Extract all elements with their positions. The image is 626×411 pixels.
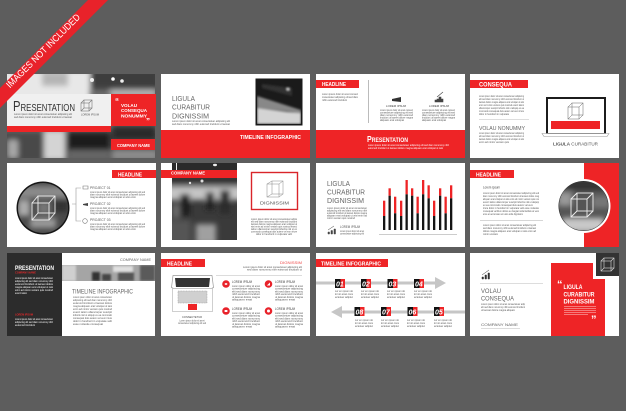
callout: quote xyxy=(111,94,156,126)
headline tag: HEADLINE xyxy=(322,82,347,88)
text block: Lorem ipsum dolor sit amet consectetuer adip xyxy=(481,302,525,306)
step 03: 03 xyxy=(388,282,396,288)
footer text: Lorem ipsum dolor sit amet consectetuer adipiscing elit sed diam nonummy nibh xyxy=(368,143,449,147)
text block: intro: sed diam nonummy nibh euismod tincidunt ut laoreet xyxy=(14,115,72,119)
banner: images not included: IMAGES NOT INCLUDED xyxy=(4,12,83,91)
feature 2: consectetuer adipiscing xyxy=(275,287,304,291)
step 01: Lor em ipsum do xyxy=(335,289,354,293)
text block right aligned: sed diam nonummy nibh euismod tincidunt ut xyxy=(247,268,302,272)
headline tag xyxy=(112,170,156,178)
step 08: ectetuer adipisc xyxy=(355,324,374,328)
step 07: 07 xyxy=(382,310,391,316)
heading: LIGULA xyxy=(172,94,195,103)
text block xyxy=(322,92,358,102)
photo: blurred interior xyxy=(7,74,155,158)
red strip xyxy=(7,126,111,132)
text block: Lorem ipsum dolor sit amet consectetuer xyxy=(327,206,367,210)
column two: LOREM IPSUM xyxy=(429,104,450,108)
project 03: diam nonummy nibh euismod tincidunt ut laoreet dolore xyxy=(90,224,145,228)
sidebar text: euismod tincidunt ut laoreet dolore xyxy=(15,282,54,286)
heading xyxy=(172,94,210,120)
text block: commodo consequat duis autem vel eum iriure xyxy=(479,109,524,113)
text block: laoreet dolore magna aliquam erat volutpat ut wisi xyxy=(479,137,524,141)
red quote block: CURABITUR xyxy=(564,292,595,298)
step 06: 06 xyxy=(408,310,416,316)
project 02: PROJECT 02 xyxy=(90,202,111,206)
heading: presentation: PRESENTATION xyxy=(13,98,75,115)
project 01: diam nonummy nibh euismod tincidunt ut laoreet dolore xyxy=(90,192,145,196)
text block: minim veniam quis nostrud xyxy=(327,216,355,220)
red quote block: LIGULA xyxy=(564,285,583,291)
text block: minim veniam xyxy=(483,232,498,236)
heading: DIGNISSIM xyxy=(327,196,364,205)
step 04: 04 xyxy=(415,282,423,288)
text block: Lorem ipsum dolor sit amet consectetuer adipiscing xyxy=(479,131,524,135)
icon: laptop top view xyxy=(172,276,214,312)
headline tag: TIMELINE INFOGRAPHIC xyxy=(321,262,381,268)
cube caption: LOREM IPSUM xyxy=(81,114,99,116)
heading: presentation: PRESENTATION xyxy=(367,134,408,144)
photo circle with cube xyxy=(556,179,610,233)
feature 1: consectetuer adipiscing xyxy=(232,287,261,291)
heading xyxy=(481,288,514,302)
text block: aliquam erat volutpat ut wisi enim ad xyxy=(327,214,368,218)
label: company name xyxy=(481,322,520,329)
text block: exerci tation ullamcorper suscipit xyxy=(73,310,112,314)
text block: adipiscing elit sed diam nonummy nibh xyxy=(327,208,367,212)
step 03: lor sit amet cons xyxy=(387,292,406,296)
headline tag xyxy=(161,259,205,268)
text block: elit sed diam nonummy nibh euismod tincidunt ut xyxy=(479,97,524,101)
project 01: Lorem ipsum dolor sit amet consectetuer adipiscing elit sed xyxy=(90,190,145,194)
headline tag: HEADLINE xyxy=(167,262,192,268)
step 06 xyxy=(407,307,426,328)
text block: Lorem ipsum dolor sit amet consectetuer adipiscing xyxy=(479,94,524,98)
step 07: ectetuer adipisc xyxy=(381,324,400,328)
step 08 xyxy=(354,307,374,328)
step 04: Lor em ipsum do xyxy=(414,289,433,293)
red quote block xyxy=(551,263,605,336)
text block right aligned xyxy=(243,265,302,272)
text block: diam nonummy nibh euismod tincidunt ut laoreet dolore mag xyxy=(483,194,539,198)
text block: ex ea commodo consequat duis autem vel eum xyxy=(483,203,533,207)
step 05: lor sit amet cons xyxy=(434,321,453,325)
feature 4 xyxy=(265,307,304,328)
heading: CURABITUR xyxy=(172,102,210,112)
feature 4: ut laoreet dolore magna xyxy=(275,322,304,326)
text block: dolore magna aliquam erat volutpat ut wisi enim ad xyxy=(483,229,536,233)
text block xyxy=(327,206,368,220)
red subheading: COMPANY NAME xyxy=(15,270,36,274)
sidebar text: Lorem ipsum dolor sit amet consectetuer xyxy=(15,276,53,280)
text block: consequat duis autem vel eum iriure xyxy=(73,316,113,320)
light title panel xyxy=(7,94,111,126)
sidebar text: adipiscing elit sed diam nonummy nibh xyxy=(15,320,53,324)
feature 2: LOREM IPSUM xyxy=(275,280,295,284)
step 04 xyxy=(414,279,433,299)
headline tag xyxy=(470,170,514,178)
project 01: PROJECT 01 xyxy=(90,186,111,190)
feature 4: Lorem ipsum dolor sit amet xyxy=(275,311,303,315)
feature 2: elit sed diam nonummy xyxy=(275,289,304,293)
heading: DIGNISSIM xyxy=(172,112,209,120)
project 02: magna aliquam erat volutpat ut wisi enim xyxy=(90,211,136,215)
lorem caption: LOREM IPSUM xyxy=(340,225,360,229)
headline tag: CONSEQUA xyxy=(479,82,513,88)
project 02 xyxy=(90,202,145,215)
text block: enim ad minim veniam quis nostrud exerci tation xyxy=(479,103,524,107)
text block: nibh euismod tincidunt xyxy=(322,98,347,102)
text block xyxy=(73,295,113,326)
step 08: 08 xyxy=(356,310,363,316)
heading: timeline infographic: TIMELINE INFOGRAPHIC xyxy=(72,288,133,296)
text block: ullamcorper suscipit lobortis nisl ut aliquip ex ea xyxy=(479,106,524,110)
feature 4: consectetuer adipiscing xyxy=(275,314,304,318)
label: dignissim: DIGNISSIM xyxy=(280,260,302,265)
icon: megaphone xyxy=(392,97,401,102)
text block: lobortis nisl ut aliquip ex ea commodo xyxy=(73,313,112,317)
headline tag xyxy=(316,259,388,268)
label: company name xyxy=(161,170,237,178)
heading xyxy=(327,179,365,205)
column one: Lorem ipsum dolor sit amet consect xyxy=(380,108,413,112)
text block: euismod tincidunt ut laoreet dolore xyxy=(73,301,113,305)
column one: diam nonummy nibh euismod xyxy=(380,113,414,117)
text block: sed diam nonummy nibh euismod tincidunt ut laoreet xyxy=(172,122,230,126)
panel: slide 5 projects xyxy=(7,163,156,247)
feature 2: ut laoreet dolore magna xyxy=(275,295,304,299)
text block: sed diam nonummy nibh euismod tincidunt ut laoreet xyxy=(483,226,536,230)
text block xyxy=(483,223,536,236)
text block right aligned: Lorem ipsum dolor sit amet consectetuer adipiscing elit xyxy=(243,265,302,269)
step 02: 02 xyxy=(362,282,370,288)
step 06: Lor em ipsum do xyxy=(407,318,426,322)
panel: slide 7 bar chart xyxy=(316,163,465,247)
step 06: ectetuer adipisc xyxy=(407,324,426,328)
column two: aliquam erat volutpat xyxy=(422,118,446,122)
project 02: diam nonummy nibh euismod tincidunt ut laoreet dolore xyxy=(90,208,145,212)
text block: laoreet dolore magna aliquam erat volutpat ut xyxy=(251,222,297,226)
sidebar text: enim ad minim veniam quis nostrud xyxy=(15,288,54,292)
red side band xyxy=(584,163,619,247)
text block: dolor in hendrerit in vulputate velit xyxy=(256,232,292,236)
project 01: magna aliquam erat volutpat ut wisi enim xyxy=(90,195,136,199)
step 08: Lor em ipsum do xyxy=(355,318,374,322)
step 04: ectetuer adipisc xyxy=(414,295,433,299)
step 01: lor sit amet cons xyxy=(335,292,354,296)
panel: slide 12 quote xyxy=(470,253,619,336)
text block: dolor in hendrerit in vulputate velit xyxy=(73,319,112,323)
text block: iriure dolor in hendrerit in vulputate velit esse molestie xyxy=(483,206,539,210)
feature 1 xyxy=(222,280,261,302)
step 07: lor sit amet cons xyxy=(381,321,400,325)
label: company name: COMPANY NAME xyxy=(171,170,205,176)
text block: magna aliquam erat volutpat ut wisi xyxy=(73,304,112,308)
step 08: lor sit amet cons xyxy=(355,321,374,325)
dark sidebar xyxy=(7,253,62,336)
heading: LIGULA xyxy=(327,179,350,188)
text block: Lorem ipsum dolor sit amet consectetuer adipiscing elit sed xyxy=(483,191,539,195)
step 01: ectetuer adipisc xyxy=(335,295,354,299)
panel: slide 9 dark presentation xyxy=(7,253,155,336)
feature 3: Lorem ipsum dolor sit amet xyxy=(232,311,260,315)
project 03 xyxy=(90,218,145,231)
text block: elit sed diam nonummy nibh euismod tincidunt ut xyxy=(479,134,524,138)
feature 4: nibh euismod tincidunt xyxy=(275,319,303,323)
text block: Lorem ipsum dolor sit amet consectetuer adipis xyxy=(251,217,298,221)
icon: project 3 xyxy=(83,219,87,223)
step 07 xyxy=(381,307,400,328)
step 07: Lor em ipsum do xyxy=(381,318,400,322)
text block: dolor in hendrerit in vulputate xyxy=(479,112,509,116)
icon: chart xyxy=(328,226,336,234)
panel: slide 11 timeline xyxy=(316,253,465,336)
column two: Lorem ipsum dolor sit amet consect xyxy=(422,108,455,112)
step 05: ectetuer adipisc xyxy=(434,324,453,328)
heading: PRESENTATION xyxy=(15,266,54,272)
feature 4: aliquam erat xyxy=(275,324,295,328)
bar chart xyxy=(379,180,457,235)
step 02 xyxy=(361,279,380,299)
column one: aliquam erat volutpat xyxy=(380,118,404,122)
text block: esse molestie consequat xyxy=(73,322,103,326)
column two: consectetuer adipiscing elit sed xyxy=(422,110,456,114)
label: company name xyxy=(111,139,155,150)
step 04: lor sit amet cons xyxy=(414,292,433,296)
sidebar text: adipiscing elit sed diam nonummy nibh xyxy=(15,279,53,283)
panel: slide 10 laptop and features xyxy=(161,253,310,336)
project 03: magna aliquam erat volutpat ut wisi enim xyxy=(90,227,136,231)
text block: enim ad minim veniam quis xyxy=(479,140,510,144)
feature 1: ut laoreet dolore magna xyxy=(232,295,261,299)
text block: Lorem ipsum dolor sit amet consectetuer adipiscing elit xyxy=(172,119,230,123)
text block xyxy=(481,302,525,312)
sidebar text: Lorem ipsum dolor sit amet consectetuer xyxy=(15,317,53,321)
panel: slide 2 title and timeline xyxy=(161,74,310,158)
red footer band xyxy=(316,130,465,158)
text block: intro xyxy=(14,112,72,119)
red quote block: “ xyxy=(557,279,562,291)
callout: quote: “ xyxy=(115,97,119,106)
box: dignissim: DIGNISSIM xyxy=(260,200,289,206)
text block: consectetuer adipiscing elit sed diam xyxy=(322,95,358,99)
text block: tation ullamcorper suscipit lobortis nisl ut ex xyxy=(251,227,298,231)
photo xyxy=(256,78,302,126)
column one: tincidunt ut laoreet dolore magna xyxy=(380,116,413,120)
heading: CURABITUR xyxy=(327,188,365,196)
text block: euismod tincidunt ut laoreet dolore magna xyxy=(327,211,367,215)
banner: images not included xyxy=(0,0,108,108)
step 02: lor sit amet cons xyxy=(361,292,380,296)
step 02: ectetuer adipisc xyxy=(361,295,380,299)
feature 2: Lorem ipsum dolor sit amet xyxy=(275,284,303,288)
step 03: ectetuer adipisc xyxy=(387,295,406,299)
label: company name: COMPANY NAME xyxy=(481,322,518,327)
feature 3: aliquam erat xyxy=(232,324,252,328)
text block: consequat vel illum dolore eu feugiat nulla facilisis at vero xyxy=(483,209,539,213)
sidebar text: magna aliquam erat volutpat ut wisi xyxy=(15,285,53,289)
feature 1: elit sed diam nonummy xyxy=(232,289,261,293)
text block: laoreet dolore magna aliquam erat volutpat ut wisi xyxy=(479,100,524,104)
headline tag xyxy=(470,80,528,88)
headline tag: HEADLINE xyxy=(476,172,501,178)
text block: Lorem ipsum dolor sit amet consectetuer xyxy=(73,295,112,299)
panel: slide 3 headline and presentation xyxy=(316,74,465,158)
project 02: Lorem ipsum dolor sit amet consectetuer adipiscing elit sed xyxy=(90,206,145,210)
column two: diam nonummy nibh euismod xyxy=(422,113,456,117)
feature 1: Lorem ipsum dolor sit amet xyxy=(232,284,260,288)
label: timeline infographic: TIMELINE INFOGRAPHIC xyxy=(240,135,301,141)
footer text xyxy=(368,143,449,150)
icon: chart xyxy=(435,92,443,102)
heading: VOLAU xyxy=(481,288,501,295)
arrow: top right xyxy=(316,277,446,289)
column one: consectetuer adipiscing elit sed xyxy=(380,110,414,114)
lorem caption: Lorem ipsum dolor sit amet xyxy=(340,229,364,233)
box: dignissim xyxy=(252,172,298,210)
text block: adipiscing elit sed diam nonummy nibh xyxy=(73,298,112,302)
text block: enim ad minim veniam quis nostrud xyxy=(73,307,113,311)
subheading: Lorem ipsum xyxy=(483,186,500,190)
step 03 xyxy=(387,279,406,299)
step 05 xyxy=(434,307,453,328)
callout: quote: VOLAU xyxy=(121,103,138,108)
feature 1: nibh euismod tincidunt xyxy=(232,292,260,296)
label: company name: COMPANY NAME xyxy=(117,143,150,148)
subheading: VOLAU NONUMMY xyxy=(479,126,526,132)
panel: slide 6 company photo xyxy=(161,163,310,247)
text block: intro: Lorem ipsum dolor sit amet consectetuer adipiscing elit xyxy=(14,112,72,116)
label: company name: COMPANY NAME xyxy=(120,258,151,262)
project 03: PROJECT 03 xyxy=(90,218,111,222)
callout: quote: CONSEQUA xyxy=(121,108,148,113)
feature 4: elit sed diam nonummy xyxy=(275,316,304,320)
icon: cube xyxy=(81,100,92,111)
photo circle with cube xyxy=(16,182,70,234)
text block: elit sed diam nonummy nibh euismod tincidunt xyxy=(251,220,297,224)
feature 2: nibh euismod tincidunt xyxy=(275,292,303,296)
callout: quote: ” xyxy=(146,117,150,126)
text block xyxy=(251,217,298,236)
icon: laptop xyxy=(542,98,609,136)
red quote block: DIGNISSIM xyxy=(564,300,594,306)
text block: elit sed diam nonummy nibh euismod tincidunt xyxy=(481,305,525,309)
lorem caption: consectetuer adipiscing elit xyxy=(340,232,364,236)
feature 3 xyxy=(222,307,261,328)
feature 3: ut laoreet dolore magna xyxy=(232,322,261,326)
footer text: euismod tincidunt ut laoreet dolore magna aliquam erat volutpat ut wisi xyxy=(368,146,443,150)
sidebar text xyxy=(15,317,53,327)
project 01 xyxy=(90,186,145,199)
step 02: Lor em ipsum do xyxy=(361,289,380,293)
sidebar text: exerci tation xyxy=(15,291,27,295)
text block: aliquam erat volutpat ut wisi enim ad minim veniam quis nos xyxy=(483,197,540,201)
text block xyxy=(483,191,540,216)
photo xyxy=(172,163,237,240)
step 05: Lor em ipsum do xyxy=(434,318,453,322)
cube xyxy=(568,103,583,119)
caption: consectetuer adipiscing elit sed xyxy=(178,321,206,325)
step 06: lor sit amet cons xyxy=(407,321,426,325)
panel: slide 1 presentation cover xyxy=(7,74,156,158)
feature 3: elit sed diam nonummy xyxy=(232,316,261,320)
panel: slide 8 headline and circle xyxy=(470,163,619,247)
feature 2 xyxy=(265,280,304,302)
feature 2: aliquam erat xyxy=(275,298,295,302)
heading: CONSEQUA xyxy=(481,296,514,302)
text block xyxy=(172,119,230,126)
icon: project 1 xyxy=(83,186,88,189)
project 03: Lorem ipsum dolor sit amet consectetuer adipiscing elit sed xyxy=(90,222,145,226)
icon: dark cube box xyxy=(596,253,619,276)
bracket xyxy=(72,188,81,221)
step 03: Lor em ipsum do xyxy=(387,289,406,293)
red quote block: ” xyxy=(591,314,596,326)
text block xyxy=(479,131,524,144)
text block: ut laoreet dolore magna aliquam xyxy=(481,308,515,312)
arrow: bottom left xyxy=(331,306,465,318)
step 01: 01 xyxy=(336,282,344,288)
feature 3: LOREM IPSUM xyxy=(232,307,252,311)
text block xyxy=(479,94,524,116)
sidebar text: euismod tincidunt xyxy=(15,323,35,327)
text block: wisi enim ad minim veniam quis nostrud exerci xyxy=(251,224,297,228)
photo strip xyxy=(62,265,155,281)
sidebar text xyxy=(15,276,54,295)
feature 3: consectetuer adipiscing xyxy=(232,314,261,318)
headline tag xyxy=(316,80,359,88)
column two: tincidunt ut laoreet dolore magna xyxy=(422,116,455,120)
feature 1: LOREM IPSUM xyxy=(232,280,252,284)
icon: project 2 xyxy=(83,203,88,206)
text block: exerci tation ullamcorper suscipit lobortis nisl ut aliquip xyxy=(483,200,539,204)
feature 1: aliquam erat xyxy=(232,298,252,302)
text block: Lorem ipsum dolor sit amet consect xyxy=(322,92,358,96)
text block: commodo consequat duis autem vel eum iriure xyxy=(251,230,297,234)
lorem caption xyxy=(340,225,364,236)
red label: LOREM IPSUM xyxy=(15,312,34,316)
text block: eros et accumsan et iusto odio dignissim xyxy=(483,212,523,216)
headline tag: HEADLINE xyxy=(118,172,142,178)
icon: chart xyxy=(482,270,490,279)
callout: quote: NONUMMY xyxy=(121,114,147,118)
caption: Lorem ipsum dolor sit amet xyxy=(180,318,205,322)
step 01 xyxy=(335,279,354,299)
caption: CONSECTETUR xyxy=(182,315,203,319)
caption xyxy=(178,315,206,325)
text block: Lorem ipsum dolor sit amet consectetuer adipiscing elit xyxy=(483,223,536,227)
column one xyxy=(380,104,414,122)
column two xyxy=(422,104,456,122)
step 05: 05 xyxy=(435,310,443,316)
feature 3: nibh euismod tincidunt xyxy=(232,319,260,323)
feature 4: LOREM IPSUM xyxy=(275,307,295,311)
red footer band xyxy=(161,130,310,158)
panel: slide 4 consequa laptop xyxy=(470,74,619,158)
column one: LOREM IPSUM xyxy=(386,104,407,108)
caption: LIGULA CURABITUR xyxy=(553,142,598,148)
